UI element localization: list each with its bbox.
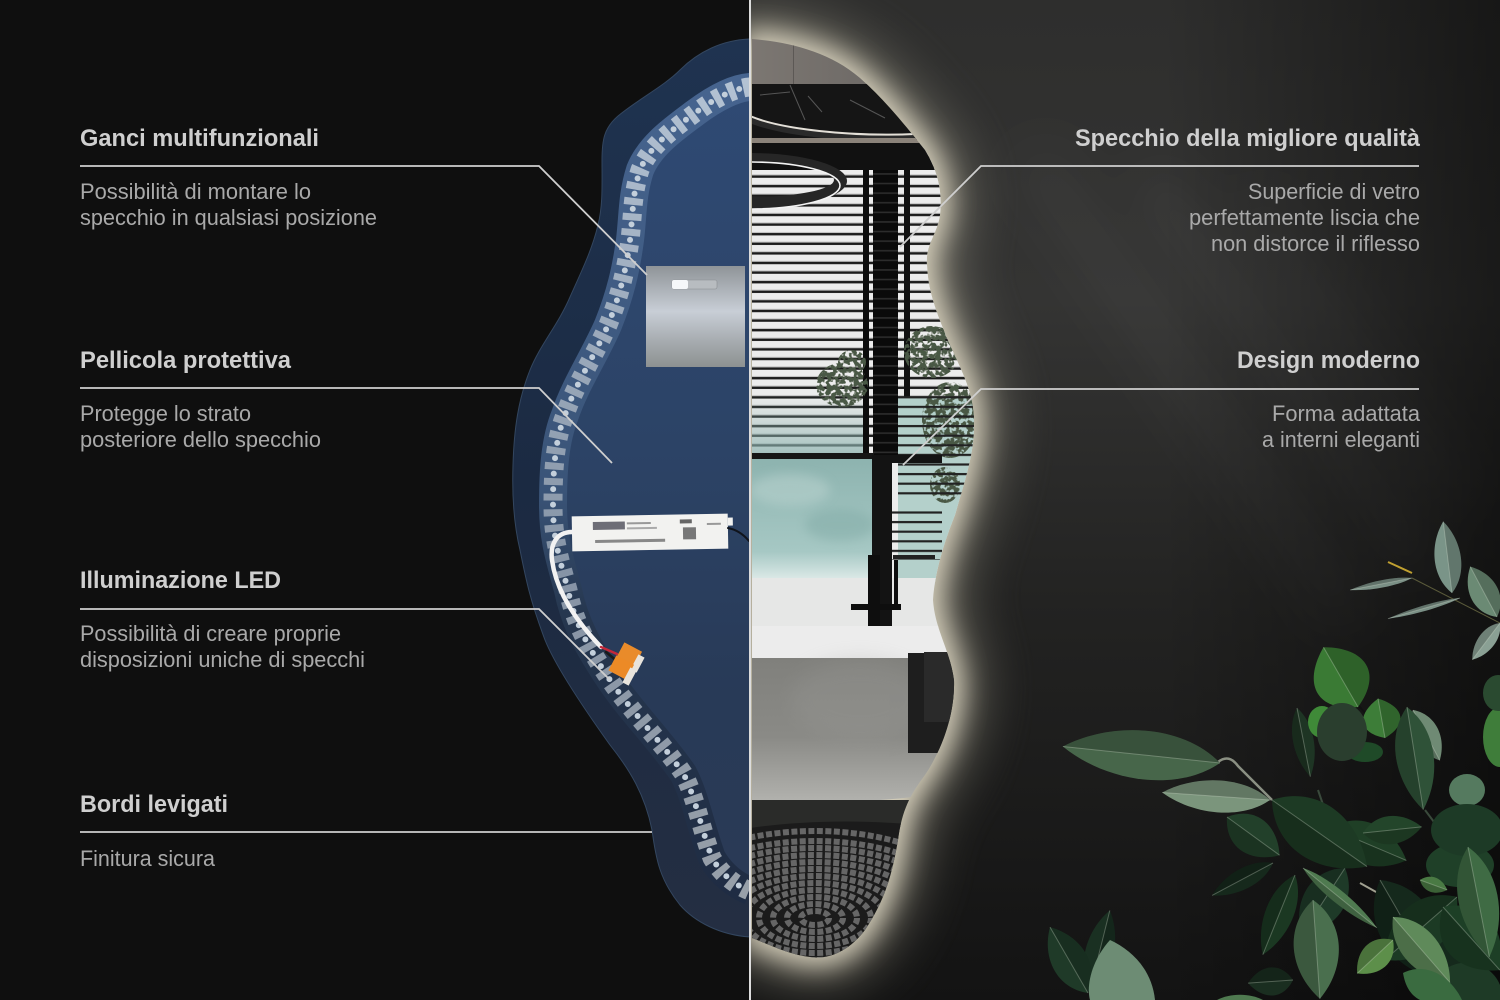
description: posteriore dello specchio bbox=[80, 427, 321, 452]
ceiling wall bbox=[752, 39, 870, 88]
window blinds left bbox=[750, 170, 864, 455]
upper eucalyptus leaves bbox=[1349, 520, 1500, 767]
towel bbox=[908, 652, 958, 753]
lower right window view bbox=[898, 398, 974, 584]
tree behind the window bbox=[816, 326, 980, 503]
description: Finitura sicura bbox=[80, 846, 216, 871]
narrow blinds strip bbox=[898, 174, 904, 396]
feature: smooth edges bbox=[80, 791, 228, 871]
pale leaf bbox=[1089, 940, 1155, 1000]
feature: protective film bbox=[80, 347, 321, 452]
window frame bbox=[872, 455, 942, 627]
protective film blue area bbox=[567, 101, 749, 875]
window blinds right bbox=[910, 150, 971, 397]
description: perfettamente liscia che bbox=[1189, 205, 1420, 230]
white cable bbox=[552, 528, 749, 662]
leader lines right bbox=[900, 166, 1419, 465]
bath tap bbox=[851, 555, 901, 627]
back panel outer frame bbox=[513, 39, 750, 937]
bathtub bbox=[750, 626, 950, 802]
heading: Bordi levigati bbox=[80, 791, 228, 818]
plant with green leaves bbox=[1035, 520, 1500, 1000]
knitted round rug bbox=[752, 822, 901, 958]
feature: multifunctional hooks bbox=[80, 125, 377, 230]
center divider line bbox=[749, 0, 751, 1000]
large ceiling ring lamp bbox=[750, 116, 918, 138]
back leaves bbox=[1207, 704, 1500, 1000]
description: non distorce il riflesso bbox=[1211, 231, 1420, 256]
mirror glow halo bbox=[752, 39, 974, 958]
right wall background panel bbox=[751, 0, 1500, 900]
leader lines left bbox=[80, 166, 652, 832]
heading: Specchio della migliore qualità bbox=[1075, 125, 1421, 152]
heading: Design moderno bbox=[1237, 347, 1420, 374]
plant stems bbox=[1218, 562, 1500, 897]
heading: Ganci multifunzionali bbox=[80, 125, 319, 152]
left dark background panel bbox=[0, 0, 750, 1000]
LED driver box bbox=[572, 514, 733, 551]
pendant ring lamp bbox=[752, 153, 847, 208]
central big leaves bbox=[1060, 704, 1500, 960]
heading: Pellicola protettiva bbox=[80, 347, 292, 374]
description: Forma adattata bbox=[1272, 401, 1421, 426]
description: disposizioni uniche di specchi bbox=[80, 647, 365, 672]
floor bbox=[752, 800, 909, 840]
description: Superficie di vetro bbox=[1248, 179, 1420, 204]
bottom light green leaf bbox=[1403, 969, 1462, 1000]
mirror front reflection scene bbox=[752, 39, 974, 958]
description: a interni eleganti bbox=[1262, 427, 1420, 452]
feature: best quality mirror bbox=[1075, 125, 1421, 256]
pale window base bbox=[750, 578, 950, 628]
dark column with slats bbox=[863, 170, 910, 455]
heading: Illuminazione LED bbox=[80, 567, 281, 594]
top beige strip and dark band bbox=[750, 138, 940, 170]
teal tint on lower blinds bbox=[752, 402, 863, 453]
feature: modern design bbox=[1237, 347, 1421, 452]
lower window teal view bbox=[750, 453, 875, 583]
marble ceiling bbox=[752, 84, 917, 140]
feature: LED lighting bbox=[80, 567, 365, 672]
description: Possibilità di montare lo bbox=[80, 179, 311, 204]
hook mounting plate bbox=[646, 266, 745, 367]
orange connectors bbox=[608, 642, 645, 686]
bottom dark leaf bbox=[1448, 963, 1500, 1000]
description: Possibilità di creare proprie bbox=[80, 621, 341, 646]
hook bbox=[672, 280, 717, 289]
mirror back side bbox=[513, 39, 750, 937]
bottom left sprig bbox=[1035, 907, 1155, 1000]
description: specchio in qualsiasi posizione bbox=[80, 205, 377, 230]
round green leaves bbox=[1308, 647, 1400, 762]
LED strip bbox=[553, 87, 750, 891]
diagonal light rays on the wall bbox=[1010, 141, 1477, 629]
window opening base bbox=[892, 143, 974, 582]
lower front leaves bbox=[1217, 843, 1500, 1000]
description: Protegge lo strato bbox=[80, 401, 251, 426]
